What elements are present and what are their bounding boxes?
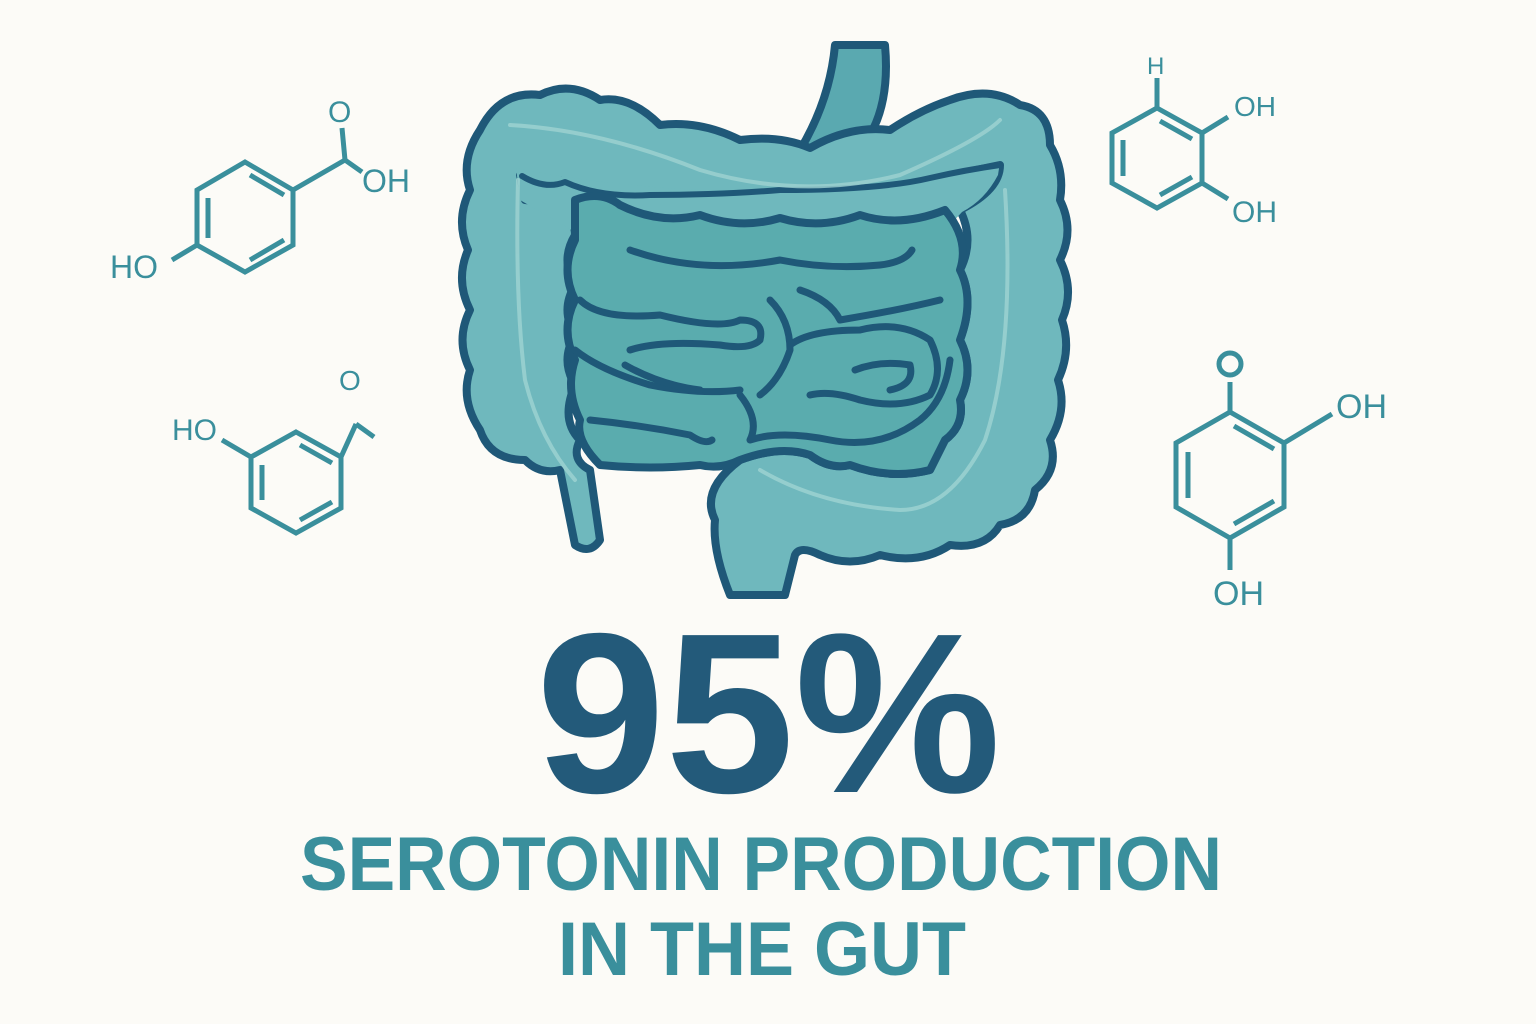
icon: molecule right xyxy=(1176,353,1387,613)
big number: 95% xyxy=(536,587,1001,841)
esophagus xyxy=(800,45,886,150)
subtitle line 2: IN THE GUT xyxy=(558,907,966,992)
icon: molecule right: OH xyxy=(1213,575,1264,613)
icon: molecule right: OH xyxy=(1336,388,1387,426)
icon: molecule top-left: OH xyxy=(362,163,410,199)
small intestine area xyxy=(568,196,968,474)
icon: molecule top-left xyxy=(110,96,410,285)
icon: molecule left-middle: O xyxy=(339,365,361,396)
icon: intestines xyxy=(462,45,1068,595)
subtitle line 1: SEROTONIN PRODUCTION xyxy=(300,822,1222,907)
gap filler xyxy=(516,162,1000,235)
colon inner edge line xyxy=(522,165,1000,195)
icon: molecule left-middle xyxy=(172,365,374,533)
icon: molecule top-left: O xyxy=(328,96,351,129)
icon: molecule top-right: H xyxy=(1147,53,1164,80)
icon: molecule top-right xyxy=(1112,53,1277,229)
icon: molecule left-middle: HO xyxy=(172,414,217,447)
icon: molecule top-right: OH xyxy=(1234,91,1276,122)
large intestine outer xyxy=(462,89,1068,595)
icon: molecule top-left: HO xyxy=(110,249,158,285)
icon: molecule top-right: OH xyxy=(1232,196,1277,229)
